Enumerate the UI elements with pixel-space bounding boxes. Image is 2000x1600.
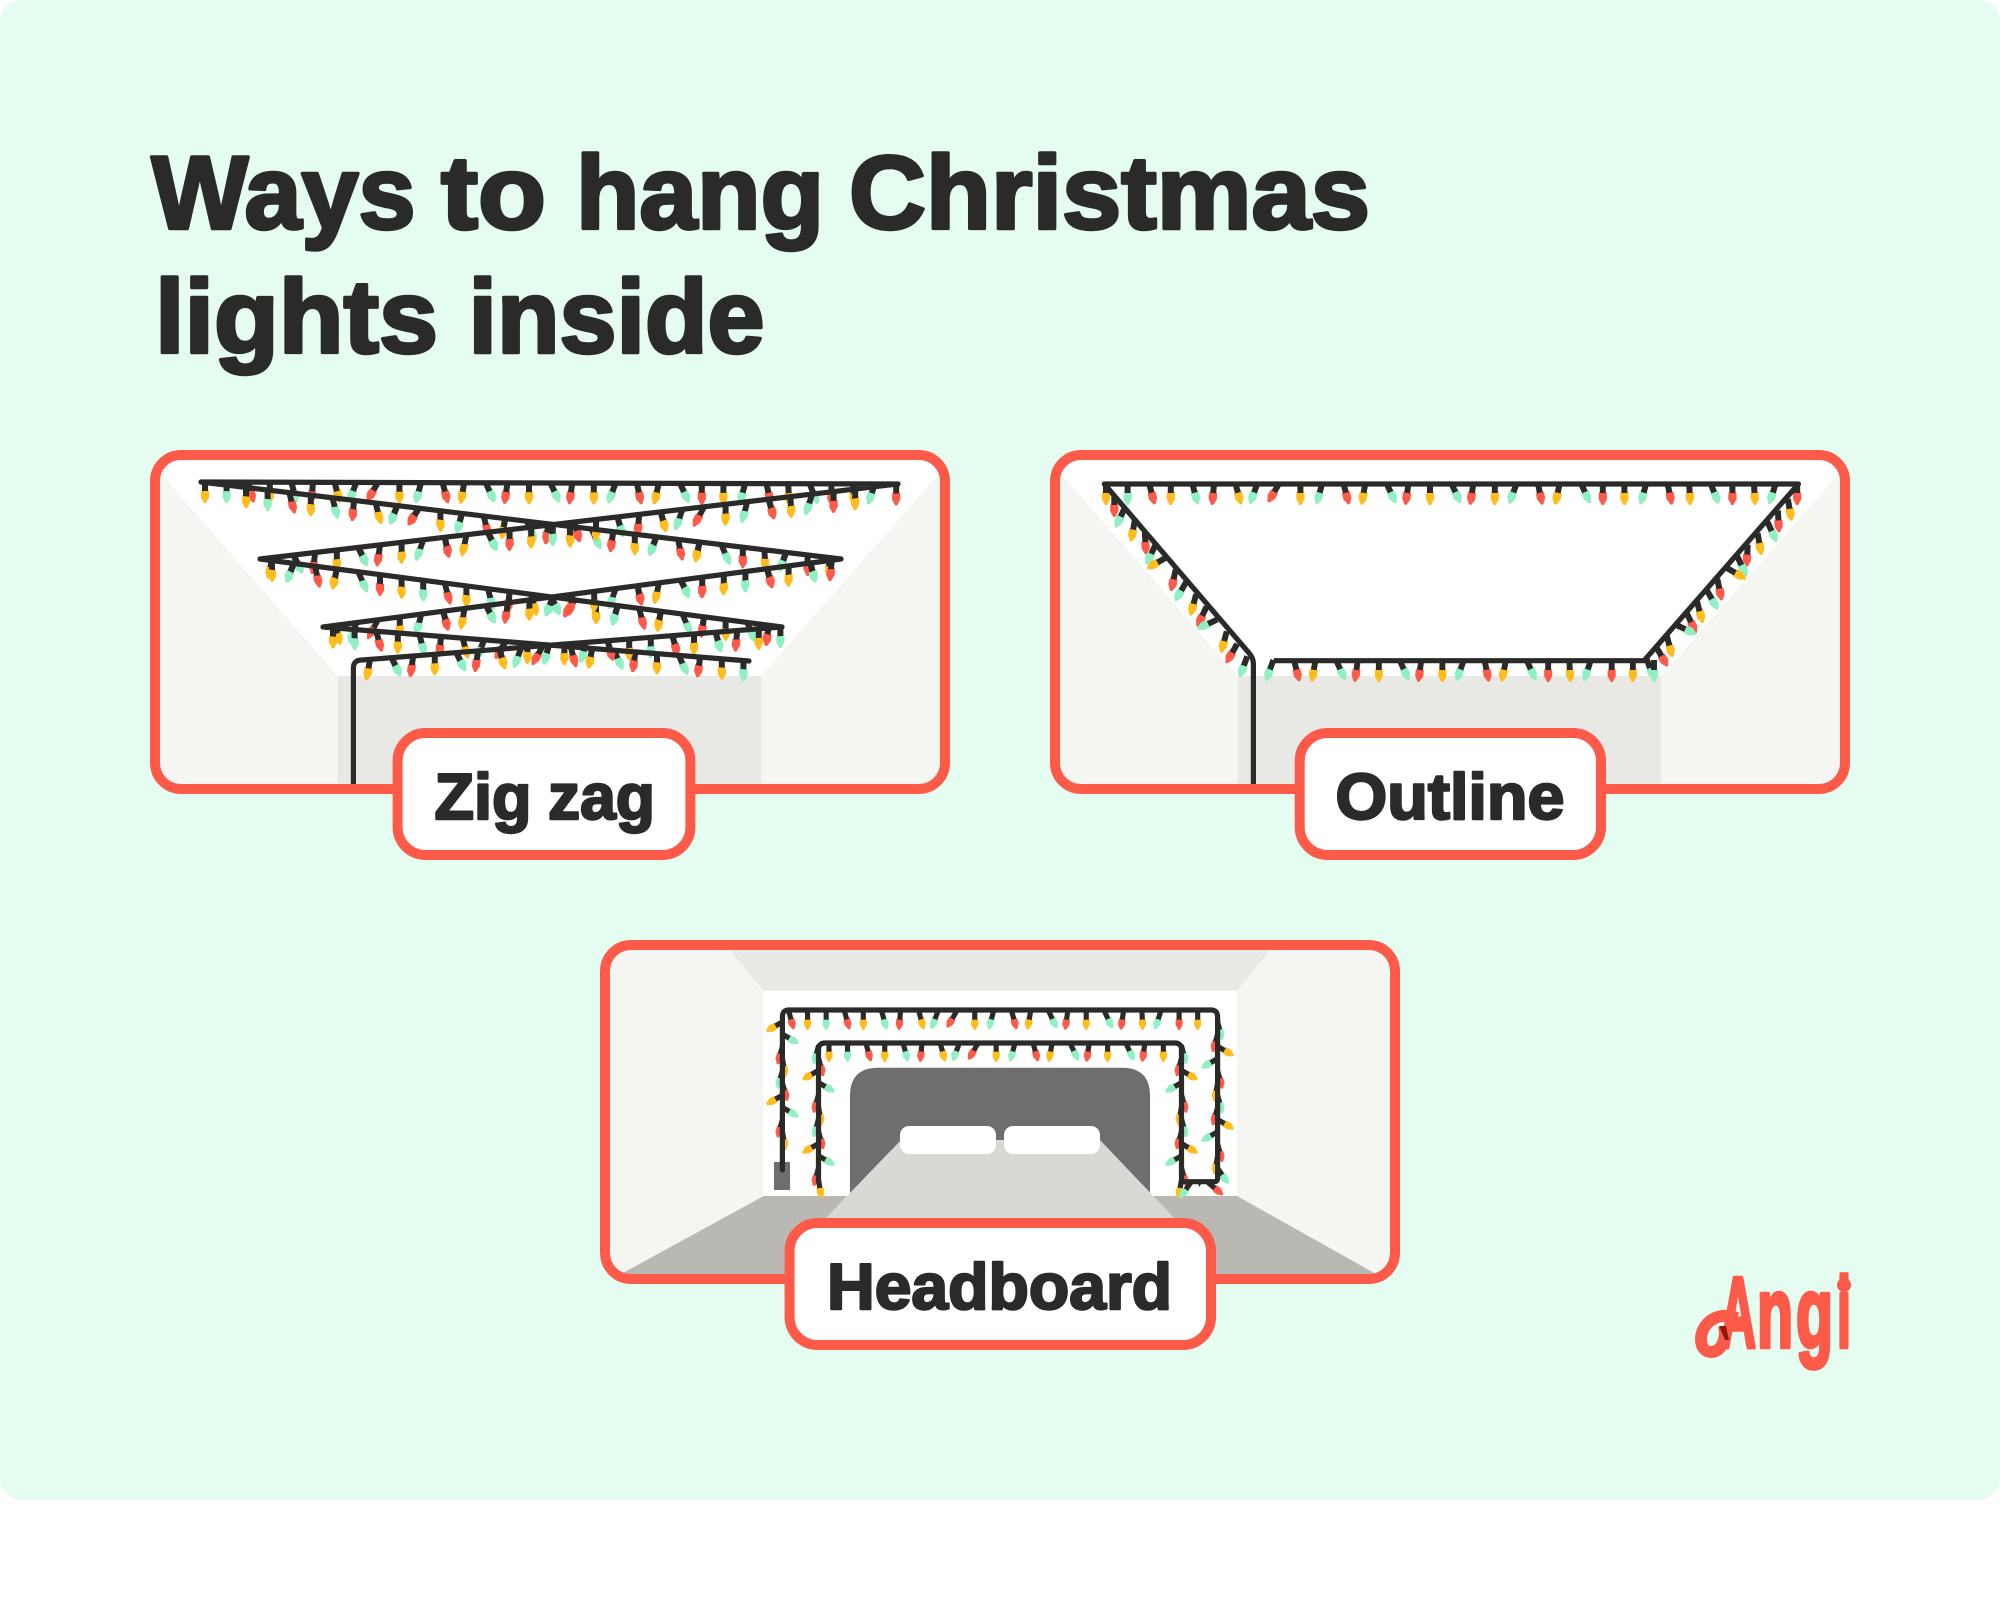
string lights: outline [1102,481,1801,784]
label: Zig zag [398,733,690,855]
room: walls, ceiling, floor [605,945,1395,1279]
string lights: zig zag [201,479,900,784]
bed [820,1140,1180,1224]
title: to [441,136,546,252]
panel frame [605,945,1395,1279]
title: inside [468,260,764,376]
title: Ways [152,136,416,252]
label: Zig zag: Zig [434,760,532,833]
room: walls and ceiling [1055,455,1845,789]
logo: Angi: i [1837,1257,1851,1369]
pillows [900,1126,1100,1154]
headboard [850,1068,1150,1196]
string lights: headboard [765,1009,1235,1200]
title: lights [155,260,438,376]
panel frame [155,455,945,789]
panel: zig zag [155,455,945,855]
title [152,136,1370,376]
wall outlet [774,1162,790,1190]
room: walls and ceiling [155,455,945,789]
logo: Angi: n [1757,1257,1793,1369]
panel: outline [1055,455,1845,855]
label: Outline [1300,733,1601,855]
logo: Angi: A [1720,1257,1756,1369]
label: Headboard [790,1223,1211,1345]
label: Headboard: Headboard [827,1250,1172,1323]
label: Outline: Outline [1336,760,1564,833]
panel: headboard [605,945,1395,1345]
logo: Angi [1701,1257,1851,1369]
title: hang [576,136,824,252]
logo: Angi: g [1796,1257,1833,1369]
panel frame [1055,455,1845,789]
title: Christmas [849,136,1370,252]
label: Zig zag: zag [548,760,655,833]
